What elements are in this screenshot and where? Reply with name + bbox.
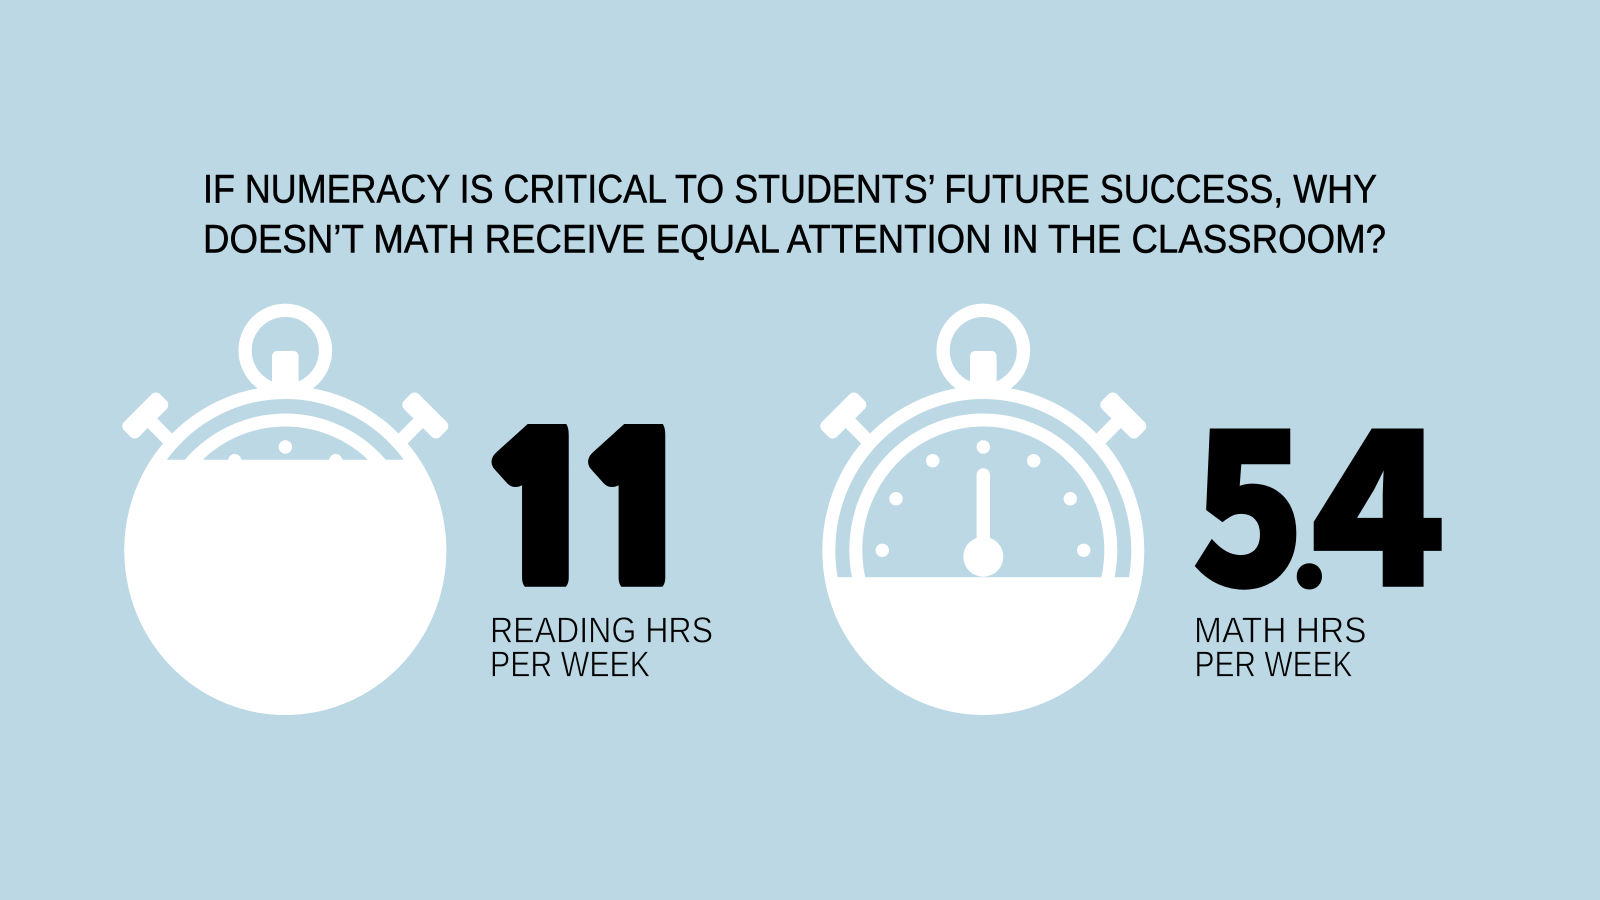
label: reading hrs per week [490,609,713,685]
number: 5.4: 4 [1311,339,1445,647]
title [203,167,1386,261]
title: IF NUMERACY IS CRITICAL TO STUDENTS’ FUTURE SUCCESS, WHY [203,167,1377,211]
number: 5.4 [1192,339,1445,647]
title: DOESN’T MATH RECEIVE EQUAL ATTENTION IN THE CLASSROOM? [203,217,1386,261]
label: reading hrs per week: READING HRS [490,609,713,650]
fill level: math [824,577,1142,715]
fill level: reading [124,460,446,715]
label: reading hrs per week: PER WEEK [490,644,650,685]
label: math hrs per week: PER WEEK [1194,644,1352,685]
label: math hrs per week: MATH HRS [1194,609,1366,650]
label: math hrs per week [1194,609,1366,685]
number: 5.4: 5 [1192,339,1305,647]
icon: math stopwatch [818,310,1149,715]
number: 5.4: . [1290,459,1329,619]
icon: reading stopwatch [120,310,451,715]
number: 11: 11 [479,412,700,611]
